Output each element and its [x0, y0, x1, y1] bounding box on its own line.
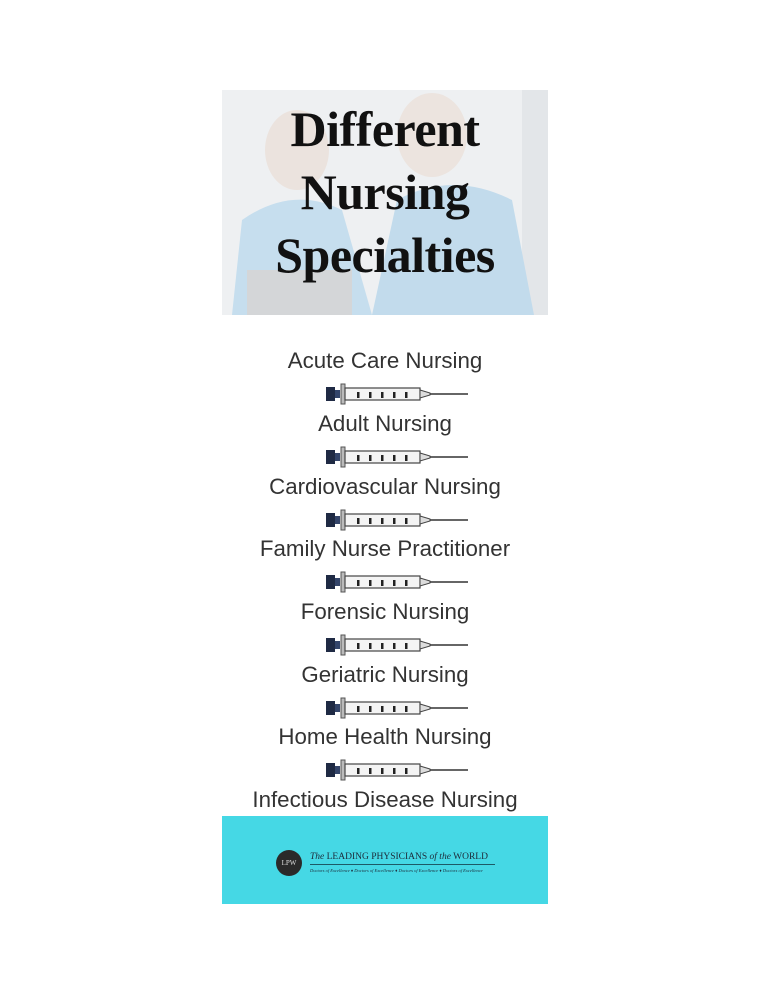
icon: syringe 7: [326, 760, 468, 780]
label 5: Forensic Nursing: [301, 599, 469, 624]
logo text: [310, 852, 495, 873]
icon: syringe 6: [326, 698, 468, 718]
label 1: Acute Care Nursing: [288, 348, 482, 373]
icon: syringe 4: [326, 572, 468, 592]
title: Different: [291, 101, 479, 157]
icon: logo circle: [276, 850, 302, 876]
logo text: Doctors of Excellence ♦ Doctors of Excellence ♦ Doctors of Excellence ♦ Doctors of Excellence: [310, 868, 483, 873]
title: [275, 101, 495, 283]
label 8: Infectious Disease Nursing: [252, 787, 518, 812]
footer: logo banner: [222, 816, 548, 904]
label 7: Home Health Nursing: [278, 724, 492, 749]
label 6: Geriatric Nursing: [301, 662, 469, 687]
icon: syringe 3: [326, 510, 468, 530]
list: specialties: [252, 348, 518, 812]
header panel: photo with title: [222, 90, 548, 315]
logo text: The LEADING PHYSICIANS of the WORLD: [310, 852, 488, 862]
icon: syringe 1: [326, 384, 468, 404]
label 3: Cardiovascular Nursing: [269, 474, 501, 499]
title: Specialties: [275, 227, 495, 283]
icon: syringe 5: [326, 634, 468, 656]
title: Nursing: [301, 164, 469, 220]
icon: logo circle: LPW: [282, 859, 296, 867]
label 2: Adult Nursing: [318, 411, 452, 436]
label 4: Family Nurse Practitioner: [260, 536, 510, 561]
icon: syringe 2: [326, 446, 468, 468]
